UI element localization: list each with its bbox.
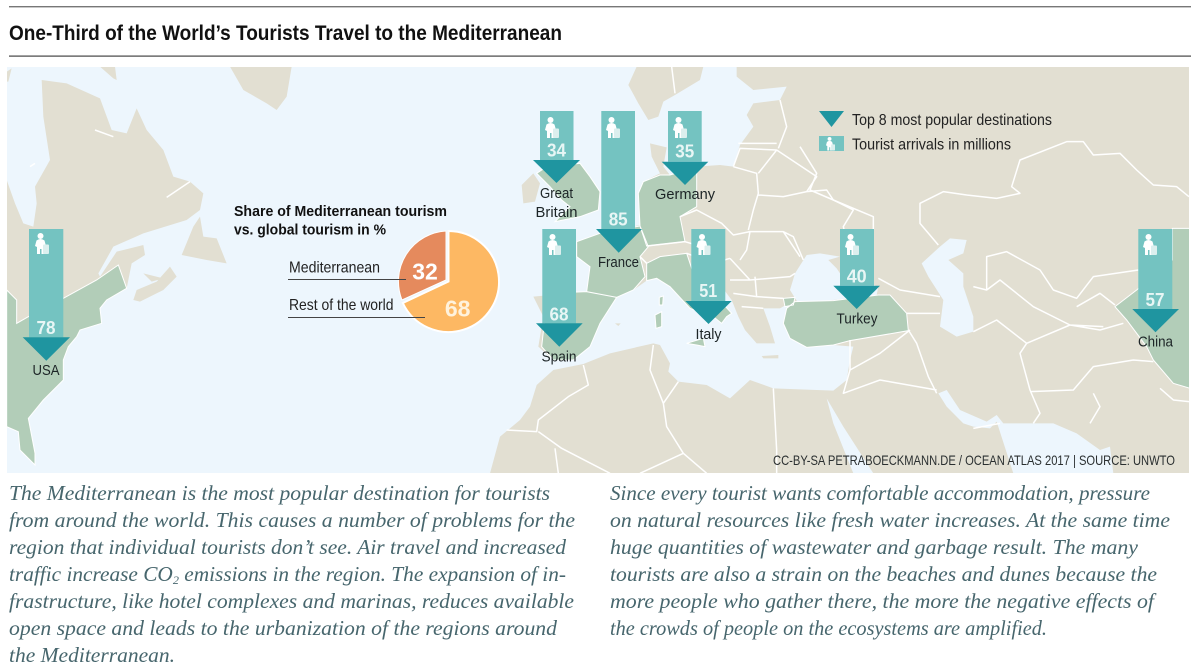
marker: Italy: 51 xyxy=(699,281,717,301)
text block: left column: from around the world. This causes a number of problems for the xyxy=(9,508,575,532)
marker: China: 57 xyxy=(1146,290,1164,310)
legend: Tourist arrivals in millions xyxy=(852,136,1011,153)
text block: left column: 2 xyxy=(173,573,179,587)
text block: right column: Since every tourist wants comfortable accommodation, pressure xyxy=(610,481,1150,505)
marker: Turkey: Turkey xyxy=(836,310,878,327)
marker: USA xyxy=(23,229,70,379)
european and african borders xyxy=(507,67,853,473)
pie label: Rest of the world: Rest of the world xyxy=(289,297,394,314)
marker: Spain: Spain xyxy=(542,349,576,366)
marker: Spain: 68 xyxy=(550,305,568,325)
marker: USA: 78 xyxy=(36,318,56,338)
chart heading: pie: vs. global tourism in % xyxy=(234,221,386,238)
marker: Italy: Italy xyxy=(696,326,722,343)
text block: right column: on natural resources like fresh water increases. At the same time xyxy=(610,508,1170,532)
marker: USA: USA xyxy=(32,362,60,379)
text block: left column: traffic increase CO xyxy=(9,562,170,586)
text block: left column xyxy=(9,481,575,667)
pie chart: 68 xyxy=(445,296,471,322)
marker: Germany: Germany xyxy=(655,186,715,203)
text block: left column: frastructure, like hotel complexes and marinas, reduces available xyxy=(9,589,574,613)
legend xyxy=(819,111,1052,153)
text block: right column: huge quantities of wastewater and garbage result. The many xyxy=(610,535,1139,559)
marker: France xyxy=(596,111,642,271)
marker: Germany xyxy=(655,111,715,203)
marker: France: 85 xyxy=(609,210,628,230)
marker: Turkey xyxy=(833,229,880,327)
marker: China: China xyxy=(1138,334,1174,351)
marker: Great Britain: Great xyxy=(540,185,574,202)
pie chart xyxy=(398,231,499,332)
marker: France: France xyxy=(598,254,639,271)
marker: Great Britain xyxy=(533,111,580,221)
legend: Top 8 most popular destinations xyxy=(852,112,1052,129)
text block: right column: tourists are also a strain on the beaches and dunes because the xyxy=(610,562,1157,586)
text block: right column: more people who gather there, the more the negative effects of xyxy=(610,589,1157,613)
text block: left column: emissions in the region. The expansion of in- xyxy=(179,562,566,586)
top rule xyxy=(9,6,1191,7)
marker: Italy xyxy=(685,229,732,343)
text block: left column: the Mediterranean. xyxy=(9,643,175,667)
text block: left column: region that individual tourists don’t see. Air travel and increased xyxy=(9,535,567,559)
text block: left column: The Mediterranean is the most popular destination for tourists xyxy=(9,481,550,505)
green countries xyxy=(537,163,1190,388)
marker: Great Britain: 34 xyxy=(547,141,566,161)
chart heading: pie xyxy=(234,203,447,238)
title: One-Third of the World’s Tourists Travel to the Mediterranean xyxy=(9,21,562,45)
marker: Germany: 35 xyxy=(675,142,694,162)
chart heading: pie: Share of Mediterranean tourism xyxy=(234,203,447,220)
marker: Spain xyxy=(536,229,583,366)
marker: Great Britain: Britain xyxy=(536,204,578,221)
map background xyxy=(7,67,1190,473)
text block: right column: the crowds of people on the ecosystems are amplified. xyxy=(610,616,1047,640)
text block: left column: open space and leads to the urbanization of the regions around xyxy=(9,616,558,640)
pie label: Mediterranean: Mediterranean xyxy=(289,259,380,276)
pie chart: 32 xyxy=(412,258,438,284)
marker: Turkey: 40 xyxy=(847,266,867,286)
marker: China xyxy=(1132,229,1179,351)
title rule xyxy=(9,56,1191,57)
text block: right column xyxy=(610,481,1170,640)
water bodies xyxy=(790,238,1113,473)
